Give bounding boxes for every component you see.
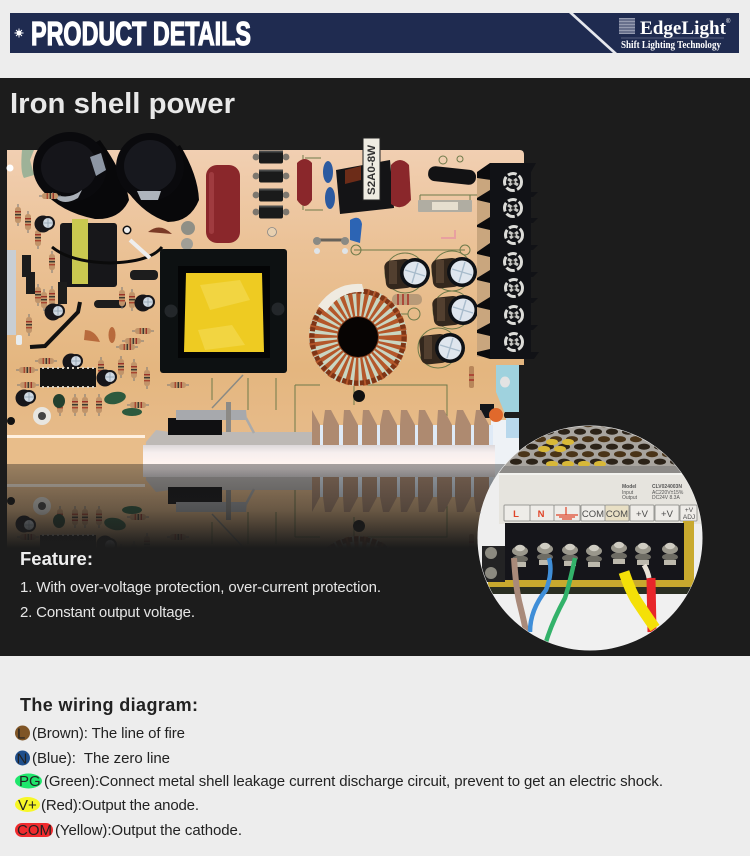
feature list: 1. With over-voltage protection, over-current protection. — [20, 579, 381, 596]
specification sticker: DC24V 8.3A — [652, 495, 680, 501]
header banner — [10, 13, 739, 53]
specification sticker: COM — [582, 509, 604, 520]
specification sticker: L — [513, 509, 519, 520]
icon: star bullet — [14, 28, 24, 38]
logo: EdgeLight — [619, 18, 731, 51]
product photo: circuit board — [6, 132, 539, 464]
legend row: V+ yellow: (Red):Output the anode. — [41, 797, 199, 814]
specification sticker: COM — [606, 509, 628, 520]
specification sticker: Output — [622, 495, 638, 501]
legend row: COM red: (Yellow):Output the cathode. — [55, 822, 242, 839]
feature heading: Feature: — [20, 549, 93, 569]
wiring diagram heading: The wiring diagram: — [20, 695, 198, 715]
gold frame and terminal block — [683, 521, 694, 587]
wiring legend — [15, 725, 663, 839]
legend row: L brown: L — [17, 726, 25, 742]
legend row: N blue: N — [16, 750, 27, 768]
panel title: Iron shell power — [10, 88, 235, 120]
specification sticker: +V — [636, 509, 649, 520]
legend row: N blue: (Blue): The zero line — [32, 750, 170, 767]
circular inset: wiring terminal photo — [478, 426, 702, 650]
colored wires — [514, 558, 655, 642]
legend row: COM red: COM — [17, 822, 52, 839]
specification sticker: +V — [685, 507, 694, 514]
legend row: V+ yellow: V+ — [18, 797, 37, 814]
specification sticker: Model — [622, 484, 637, 490]
specification sticker — [499, 475, 704, 524]
specification sticker: +V — [661, 509, 674, 520]
feature list: 2. Constant output voltage. — [20, 604, 195, 621]
label on choke: S2A0-8W — [366, 144, 378, 195]
legend row: PG green: (Green):Connect metal shell leakage current discharge circuit, prevent to get an electric shock. — [44, 773, 663, 790]
feature list — [20, 579, 381, 621]
legend row: PG green: PG — [19, 773, 41, 790]
logo: EdgeLight: ® — [726, 18, 731, 25]
banner title: PRODUCT DETAILS — [31, 15, 251, 52]
specification sticker: N — [538, 509, 545, 520]
perforated metal cover — [504, 426, 676, 467]
legend row: L brown: (Brown): The line of fire — [32, 725, 185, 742]
specification sticker: ADJ — [683, 514, 695, 521]
reflection of circuit board — [7, 464, 506, 544]
specification sticker: Input — [622, 490, 634, 496]
logo: EdgeLight: Shift Lighting Technology — [621, 40, 721, 51]
dark product panel — [0, 78, 750, 656]
specification sticker: AC220V±15% — [652, 490, 684, 496]
logo: EdgeLight: EdgeLight — [640, 18, 727, 39]
specification sticker: CLV024003N — [652, 484, 682, 490]
